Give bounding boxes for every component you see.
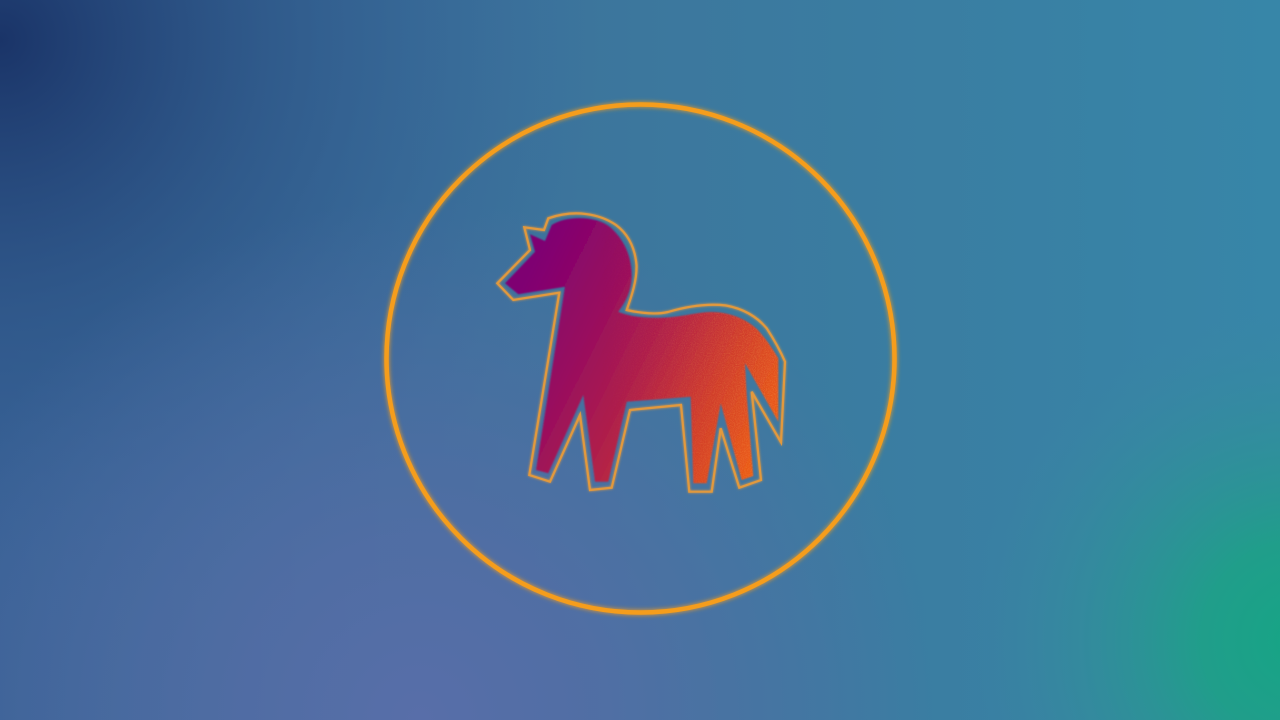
icon: horse xyxy=(494,210,788,495)
horse grain texture xyxy=(630,312,778,483)
horse body xyxy=(505,218,778,483)
horse outline xyxy=(497,213,785,492)
emblem ring xyxy=(386,104,894,612)
